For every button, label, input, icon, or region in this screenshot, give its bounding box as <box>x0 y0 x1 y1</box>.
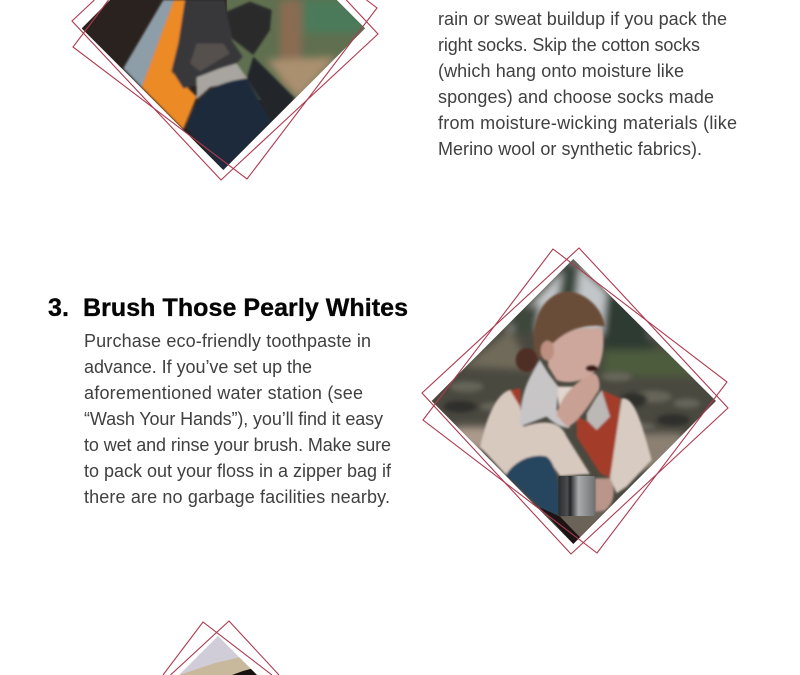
text block: toothpaste advice: to wet and rinse your brush. Make sure <box>84 435 391 455</box>
text block: socks advice: (which hang onto moisture like <box>438 61 684 81</box>
text block: toothpaste advice: aforementioned water station (see <box>84 383 363 403</box>
photo: next tip, cropped at the page bottom <box>163 621 279 675</box>
photo: woman eating outdoors <box>422 248 728 554</box>
red frame outlines <box>72 0 378 180</box>
heading: 3. Brush Those Pearly Whites: Brush Those Pearly Whites <box>83 294 408 322</box>
text block: socks advice: sponges) and choose socks made <box>438 87 714 107</box>
red frame outlines <box>422 248 728 554</box>
text block: toothpaste advice: Purchase eco-friendly toothpaste in <box>84 331 371 351</box>
text block: socks advice: right socks. Skip the cotton socks <box>438 35 700 55</box>
text block: toothpaste advice: advance. If you’ve set up the <box>84 357 312 377</box>
heading: 3. Brush Those Pearly Whites: 3. <box>48 294 69 322</box>
text block: toothpaste advice <box>84 331 392 507</box>
text block: socks advice: rain or sweat buildup if you pack the <box>438 9 727 29</box>
text block: socks advice: Merino wool or synthetic fabrics). <box>438 139 702 159</box>
text block: toothpaste advice: “Wash Your Hands”), you’ll find it easy <box>84 409 383 429</box>
red frame outlines <box>163 621 279 675</box>
text block: socks advice <box>438 9 737 159</box>
text block: socks advice: from moisture-wicking materials (like <box>438 113 737 133</box>
photo: boots in hammock <box>72 0 378 180</box>
text block: toothpaste advice: there are no garbage facilities nearby. <box>84 487 390 507</box>
text block: toothpaste advice: to pack out your floss in a zipper bag if <box>84 461 392 481</box>
